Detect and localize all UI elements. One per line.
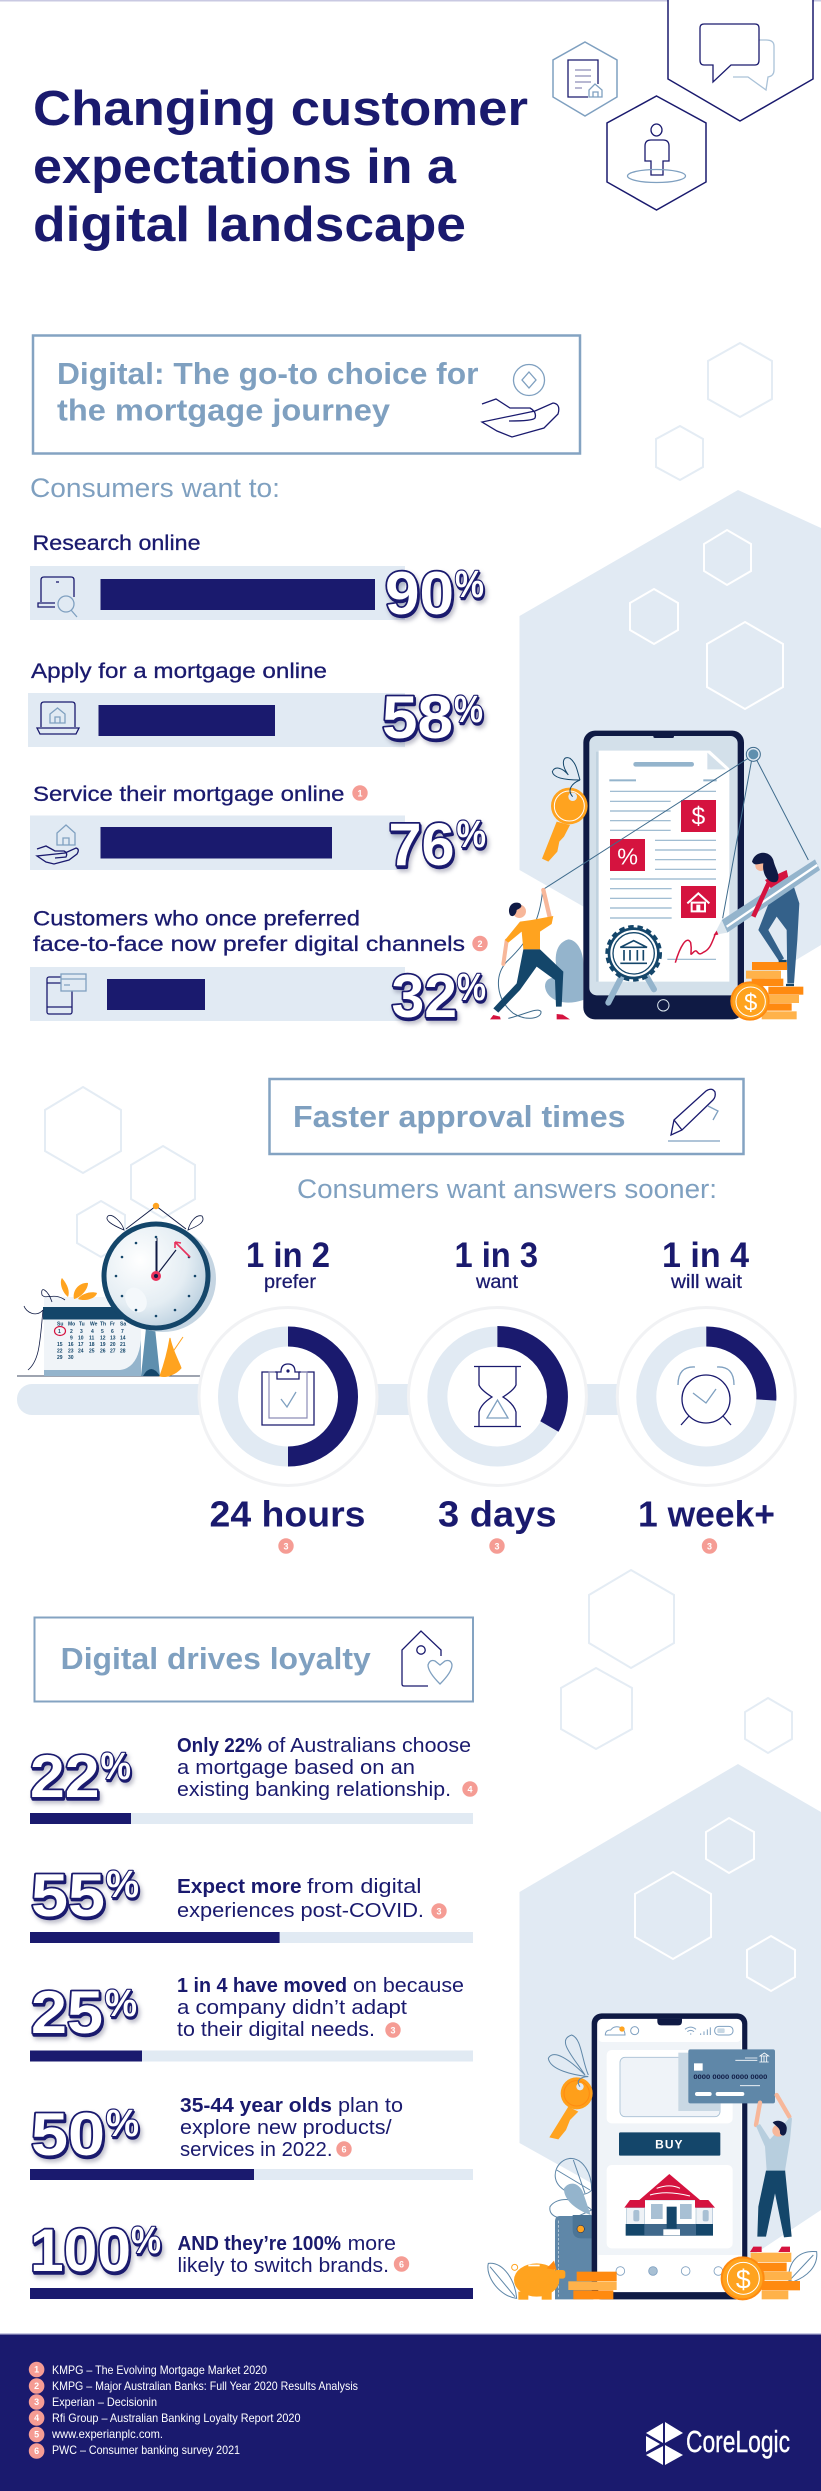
stat: 50% new products: %	[106, 2103, 139, 2145]
phone	[592, 2013, 747, 2299]
calendar: 7	[121, 1329, 124, 1335]
icon: clipboard	[262, 1364, 314, 1425]
stat row: service online 76%: %	[456, 814, 486, 856]
icon: document hexagon	[553, 42, 617, 116]
stat: 25% moved on	[30, 1974, 473, 2062]
document	[596, 751, 729, 982]
calendar: 6	[111, 1329, 114, 1335]
timeline track	[17, 1384, 657, 1415]
references list: 5	[34, 2430, 39, 2440]
heading	[57, 356, 478, 428]
stat: 22% relationship: %	[100, 1746, 131, 1788]
stat: 22% relationship: a mortgage based on an	[177, 1756, 415, 1779]
woman with pencil	[713, 853, 820, 985]
coin stacks	[731, 962, 803, 1020]
calendar: 14	[120, 1336, 126, 1342]
title: expectations in a	[33, 140, 457, 194]
footnote badge 4: 4	[467, 1784, 473, 1794]
stat: 22% relationship: of Australians choose	[268, 1734, 471, 1757]
heading: Digital: The go-to choice for	[57, 356, 478, 391]
pull ropes and pulley	[498, 747, 808, 1018]
plant	[160, 1337, 183, 1377]
subheading: consumers want to: Consumers want to:	[30, 473, 280, 503]
footnote badge 3	[278, 1538, 294, 1554]
stat: 50% new products: plan to	[338, 2094, 403, 2117]
buy button: BUY	[655, 2137, 683, 2151]
donut: 1 in 3 want 3 days	[408, 1236, 586, 1554]
stat: 22% relationship: Only 22%	[177, 1734, 262, 1757]
calendar: 5	[101, 1329, 104, 1335]
calendar: 26	[100, 1348, 106, 1354]
icon: dollar tile: $	[691, 804, 705, 831]
stat: 100% switch brands: 100	[30, 2217, 131, 2284]
calendar: 12	[100, 1336, 106, 1342]
icon: person hexagon	[607, 96, 706, 210]
calendar: 11	[89, 1336, 95, 1342]
panel: faster approval heading: Faster approval times	[293, 1099, 626, 1134]
leaves	[488, 2158, 817, 2298]
stat: 25% moved on: 25	[31, 1979, 103, 2046]
icon: research	[38, 577, 77, 617]
stat: 22% relationship: 22	[30, 1743, 100, 1810]
icon: dollar tile	[681, 800, 716, 832]
calendar: 13	[110, 1336, 116, 1342]
footnote badge 3: 3	[283, 1542, 289, 1552]
stat row: research online 90%: 90	[385, 560, 454, 627]
title: Changing customer	[33, 82, 528, 136]
references list: 2	[34, 2381, 39, 2391]
stat: 25% moved on: %	[105, 1983, 137, 2025]
icon: pen	[668, 1089, 720, 1141]
calendar: 2	[70, 1329, 73, 1335]
icon: percent tile: %	[617, 843, 638, 869]
top hexagon icons	[553, 0, 813, 210]
illustration: phone with buy screen, card, man	[488, 2013, 817, 2300]
stat row: face-to-face 32%	[30, 908, 488, 1030]
stat: 50% new products	[30, 2094, 473, 2180]
signature	[675, 935, 715, 963]
calendar: 17	[78, 1342, 84, 1348]
footer	[0, 2333, 821, 2491]
footnote badge 3	[385, 2022, 401, 2038]
stat row: research online 90%: Research online	[32, 532, 200, 555]
calendar: Fr	[110, 1322, 115, 1328]
calendar: 22	[57, 1348, 63, 1354]
icon: laptop	[37, 702, 79, 734]
references list: 4	[34, 2413, 39, 2423]
coin stacks	[568, 2253, 800, 2299]
stat row: apply online 58%	[28, 660, 483, 751]
calendar: 10	[78, 1336, 84, 1342]
icon: hourglass	[474, 1366, 521, 1426]
coin stacks: $	[744, 990, 757, 1017]
credit card: 0000 0000 0000 0000	[693, 2074, 768, 2081]
stat: 25% moved on: on because	[353, 1974, 464, 1997]
calendar: 3	[80, 1329, 83, 1335]
calendar: 9	[70, 1336, 73, 1342]
leaf behind man	[545, 939, 583, 1003]
calendar: 30	[68, 1355, 74, 1361]
footnote badge 3: 3	[494, 1542, 500, 1552]
stat: 100% switch brands: %	[131, 2220, 161, 2262]
donut: 1 in 3 want 3 days: 1 in 3	[454, 1236, 538, 1275]
calendar: 21	[120, 1342, 126, 1348]
heading: the mortgage journey	[57, 392, 391, 428]
decorative hexagons: approval section	[45, 1087, 121, 1173]
panel: digital heading	[33, 336, 580, 454]
donut: 1 in 4 will wait 1 week+: 1 week+	[638, 1494, 775, 1534]
stat: 22% relationship	[30, 1734, 478, 1824]
references list: Rfi Group – Australian Banking Loyalty Report 2020	[52, 2411, 301, 2425]
footnote badge 3: 3	[707, 1542, 712, 1552]
stat row: face-to-face 32%: face-to-face now prefer digital channels	[33, 933, 465, 956]
footnote badge 1	[352, 785, 368, 801]
stat: 55% expect more: %	[106, 1864, 139, 1906]
man pulling rope	[490, 890, 570, 1019]
calendar	[17, 1278, 200, 1376]
stat row: face-to-face 32%: 32	[392, 963, 457, 1030]
man holding card	[750, 2095, 792, 2252]
stat: 55% expect more: 55	[31, 1862, 105, 1929]
CoreLogic logo	[646, 2422, 790, 2465]
key	[548, 2035, 593, 2139]
donut: 1 in 2 prefer 24 hours: 24 hours	[210, 1494, 366, 1534]
stat row: research online 90%: %	[455, 564, 484, 606]
stat: 50% new products: services in 2022.	[180, 2138, 332, 2161]
footnote badge 6	[394, 2256, 409, 2272]
calendar: Th	[100, 1322, 106, 1328]
stat row: service online 76%: Service their mortgage online	[33, 783, 344, 806]
stat: 55% expect more: from digital	[307, 1875, 422, 1898]
calendar: 19	[100, 1342, 106, 1348]
calendar: Tu	[79, 1322, 85, 1328]
references list	[29, 2362, 358, 2459]
footnote badge 1: 1	[357, 788, 363, 798]
icon: tag with heart	[402, 1631, 452, 1686]
icon: percent tile	[610, 839, 645, 871]
stat: 100% switch brands: likely to switch brands.	[178, 2254, 389, 2277]
stat: 55% expect more: Expect more	[177, 1875, 302, 1898]
calendar: 4	[91, 1329, 94, 1335]
panel: digital drives loyalty heading	[34, 1618, 473, 1702]
calendar: We	[90, 1322, 98, 1328]
stat: 50% new products: 35-44 year olds	[180, 2094, 332, 2117]
footnote badge 3	[489, 1538, 505, 1554]
stat row: face-to-face 32%: %	[457, 967, 486, 1009]
calendar: 15	[57, 1342, 63, 1348]
panel: house	[607, 2165, 733, 2248]
background hexagon: loyalty section	[520, 1764, 821, 2265]
stat: 55% expect more: experiences post-COVID.	[177, 1899, 424, 1922]
stat: 25% moved on: to their digital needs.	[177, 2018, 375, 2041]
stat: 50% new products: 50	[31, 2101, 105, 2168]
donut: 1 in 3 want 3 days: 3 days	[438, 1494, 556, 1534]
icon: alarm clock	[678, 1367, 734, 1425]
stat row: service online 76%: 76	[388, 811, 454, 878]
stat: 25% moved on: a company didn’t adapt	[177, 1996, 407, 2019]
panel: digital drives loyalty heading: Digital drives loyalty	[61, 1641, 371, 1676]
stat: 55% expect more	[30, 1862, 473, 1943]
footnote badge 6: 6	[341, 2144, 347, 2154]
donut: 1 in 3 want 3 days: want	[475, 1272, 519, 1293]
title	[33, 82, 528, 252]
calendar: 27	[110, 1348, 116, 1354]
footnote badge 6: 6	[399, 2260, 404, 2270]
background hexagon: first section	[520, 490, 821, 995]
calendar: 20	[110, 1342, 116, 1348]
references list: KMPG – The Evolving Mortgage Market 2020	[52, 2363, 267, 2377]
wallet	[555, 2215, 593, 2299]
footnote badge 3: 3	[390, 2026, 396, 2036]
icon: hand with coin	[482, 364, 559, 437]
stat: 22% relationship: existing banking relationship.	[177, 1778, 451, 1801]
stat row: apply online 58%: Apply for a mortgage online	[31, 660, 327, 683]
clock	[104, 1203, 216, 1332]
footnote badge 2: 2	[477, 939, 483, 949]
calendar: Su	[57, 1322, 63, 1328]
calendar: 18	[89, 1342, 95, 1348]
title: digital landscape	[33, 198, 466, 252]
footnote badge 3	[431, 1903, 447, 1919]
icon: house tile	[681, 886, 716, 918]
panel: card preview	[607, 2050, 733, 2123]
stat row: apply online 58%: 58	[382, 684, 453, 751]
stat: 100% switch brands: more	[348, 2232, 396, 2255]
stat row: service online 76%	[30, 783, 486, 878]
donut: 1 in 2 prefer 24 hours: prefer	[264, 1272, 317, 1293]
stat: 25% moved on: 1 in 4 have moved	[177, 1974, 347, 1997]
stat row: research online 90%	[30, 532, 484, 627]
footnote badge 4	[462, 1781, 478, 1797]
illustration: calendar and clock	[17, 1203, 216, 1377]
icon: phone and card	[47, 974, 86, 1014]
donut: 1 in 2 prefer 24 hours	[199, 1236, 377, 1554]
key	[542, 758, 588, 862]
references list: PWC – Consumer banking survey 2021	[52, 2443, 240, 2457]
calendar: 23	[68, 1348, 74, 1354]
references list: KMPG – Major Australian Banks: Full Year 2020 Results Analysis	[52, 2379, 358, 2393]
donut: 1 in 4 will wait 1 week+: will wait	[670, 1272, 743, 1293]
footnote badge 3	[702, 1538, 717, 1554]
donut: 1 in 4 will wait 1 week+: 1 in 4	[662, 1236, 750, 1275]
credit card	[688, 2049, 775, 2103]
subheading: consumers want answers sooner: Consumers want answers sooner:	[297, 1174, 717, 1204]
references list: 6	[34, 2446, 39, 2456]
stat row: apply online 58%: %	[454, 689, 483, 731]
references list: 3	[34, 2397, 39, 2407]
panel: faster approval heading	[270, 1079, 744, 1154]
references list: www.experianplc.com.	[51, 2427, 163, 2441]
phone	[583, 731, 744, 1019]
stat: 50% new products: explore new products/	[180, 2116, 392, 2139]
calendar: 25	[89, 1348, 95, 1354]
footnote badge 3: 3	[436, 1906, 442, 1916]
coin stacks: $	[736, 2264, 751, 2294]
illustration: phone with document, man, woman	[490, 731, 820, 1020]
stat row: face-to-face 32%: Customers who once preferred	[33, 908, 360, 930]
stat: 100% switch brands	[30, 2217, 473, 2299]
seal	[608, 927, 660, 1003]
icon: hand with house	[37, 825, 78, 864]
calendar: 1	[58, 1329, 61, 1335]
stat: 100% switch brands: AND they’re 100%	[178, 2232, 341, 2255]
references list: 1	[34, 2364, 39, 2374]
clock stand	[141, 1328, 160, 1376]
icon: speech bubble hexagon	[668, 0, 813, 121]
footnote badge 2	[472, 936, 488, 951]
calendar: Sa	[120, 1322, 126, 1328]
pagination dots	[616, 2267, 723, 2275]
donut: 1 in 4 will wait 1 week+	[617, 1236, 795, 1554]
footnote badge 6	[336, 2141, 352, 2157]
calendar: 28	[120, 1348, 126, 1354]
buy button	[619, 2132, 720, 2156]
decorative hexagons: loyalty section	[589, 1570, 674, 1668]
calendar: 29	[57, 1355, 63, 1361]
piggy bank	[512, 2261, 565, 2300]
calendar: 24	[78, 1348, 84, 1354]
references list: Experian – Decisionin	[52, 2395, 157, 2409]
calendar: 16	[68, 1342, 74, 1348]
donut: 1 in 2 prefer 24 hours: 1 in 2	[246, 1236, 330, 1275]
calendar: Mo	[68, 1322, 75, 1328]
